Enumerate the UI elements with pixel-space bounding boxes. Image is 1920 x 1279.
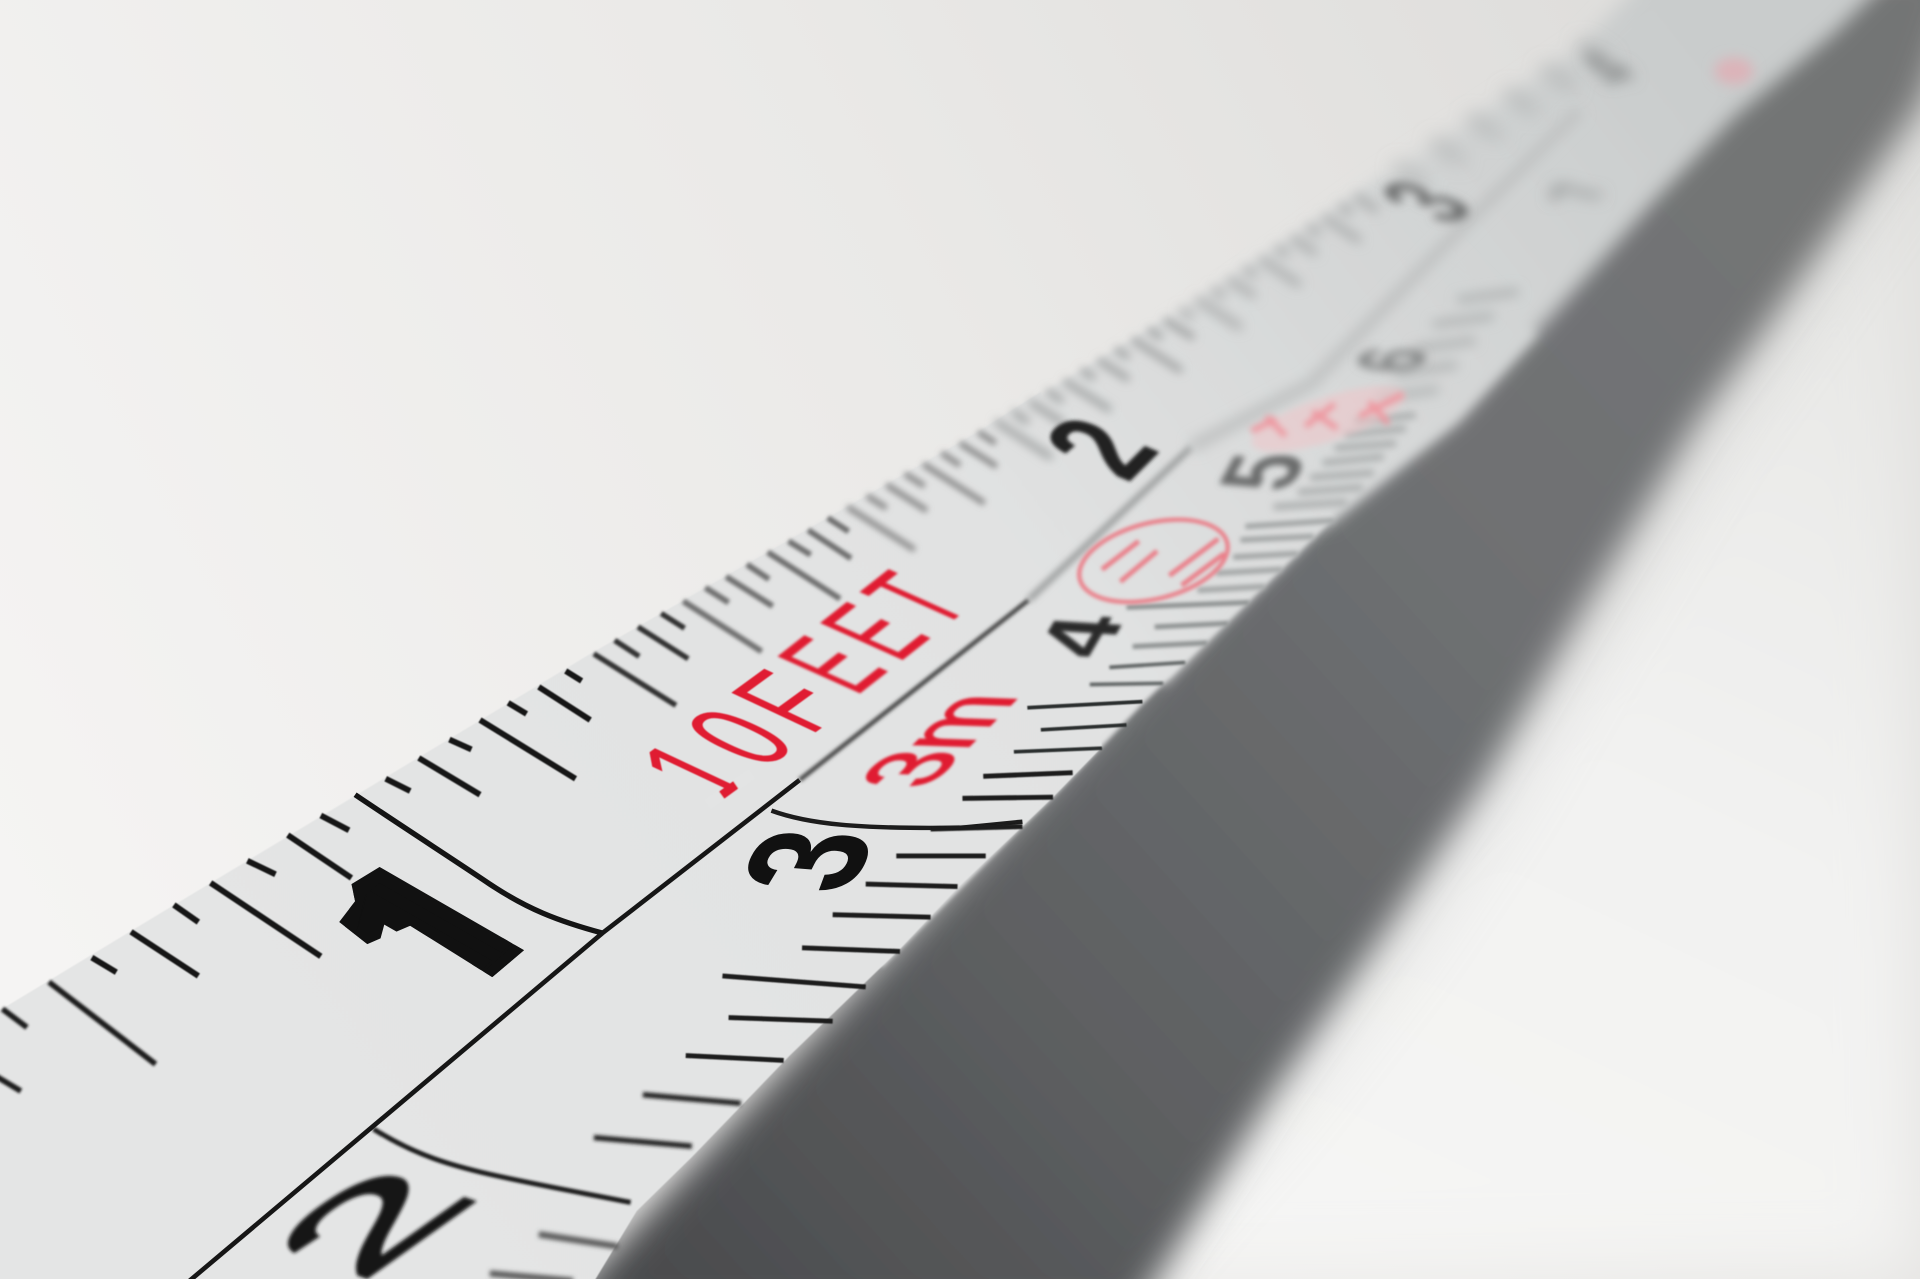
metric scale ticks (490, 291, 1518, 1279)
far blurred red marking (1714, 58, 1753, 84)
red circular stamp (1071, 506, 1236, 616)
label: 3m: 3m (834, 692, 1043, 789)
blurred red markings (1245, 373, 1412, 465)
label: 10 FEET: EET (748, 551, 1007, 709)
numeral: 2 foot: 2 (1012, 400, 1189, 496)
numeral: 3 foot: 3 (1352, 167, 1500, 236)
numeral: 6 metric: 6 (1331, 345, 1451, 375)
numeral: 5 metric: 5 (1195, 450, 1331, 493)
numeral: 4 foot: 4 (1561, 41, 1652, 97)
metric scale curved markers (373, 811, 1022, 1202)
label: 10 FEET (605, 551, 1007, 817)
foot scale ticks (0, 43, 1610, 1091)
numeral: 4 metric: 4 (1015, 612, 1147, 660)
numeral: 3 metric: 3 (704, 823, 913, 898)
label: 10 FEET: 10F (605, 647, 887, 817)
numeral: 1 foot: 1 (261, 812, 603, 1041)
tape side wall and shadow (551, 0, 1920, 1279)
centre dividing line (184, 110, 1580, 1279)
numeral: 7 metric: 7 (1533, 183, 1625, 203)
one-foot curved marker (355, 795, 602, 933)
